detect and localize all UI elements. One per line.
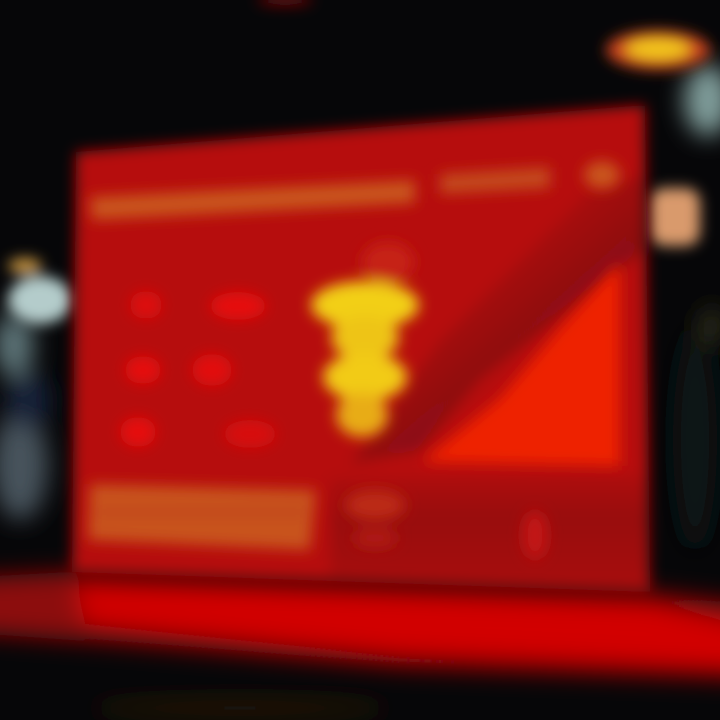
panel: red board (72, 105, 650, 592)
top red glow (257, 0, 313, 6)
bottom floor glow (90, 700, 390, 716)
chart: bright red rising triangle (422, 262, 620, 466)
background: right lights (673, 64, 720, 550)
text block: lower middle and right marks (345, 490, 547, 559)
central yellow figure (311, 242, 419, 437)
icon: yellow ceiling lamp (606, 30, 710, 70)
left list: red markers and labels (120, 291, 276, 448)
text block: orange panel lower left (88, 484, 316, 550)
title bar (90, 161, 620, 220)
bottom red band (0, 572, 720, 680)
icon: peach side light (650, 188, 700, 246)
background: left lights (0, 313, 50, 520)
